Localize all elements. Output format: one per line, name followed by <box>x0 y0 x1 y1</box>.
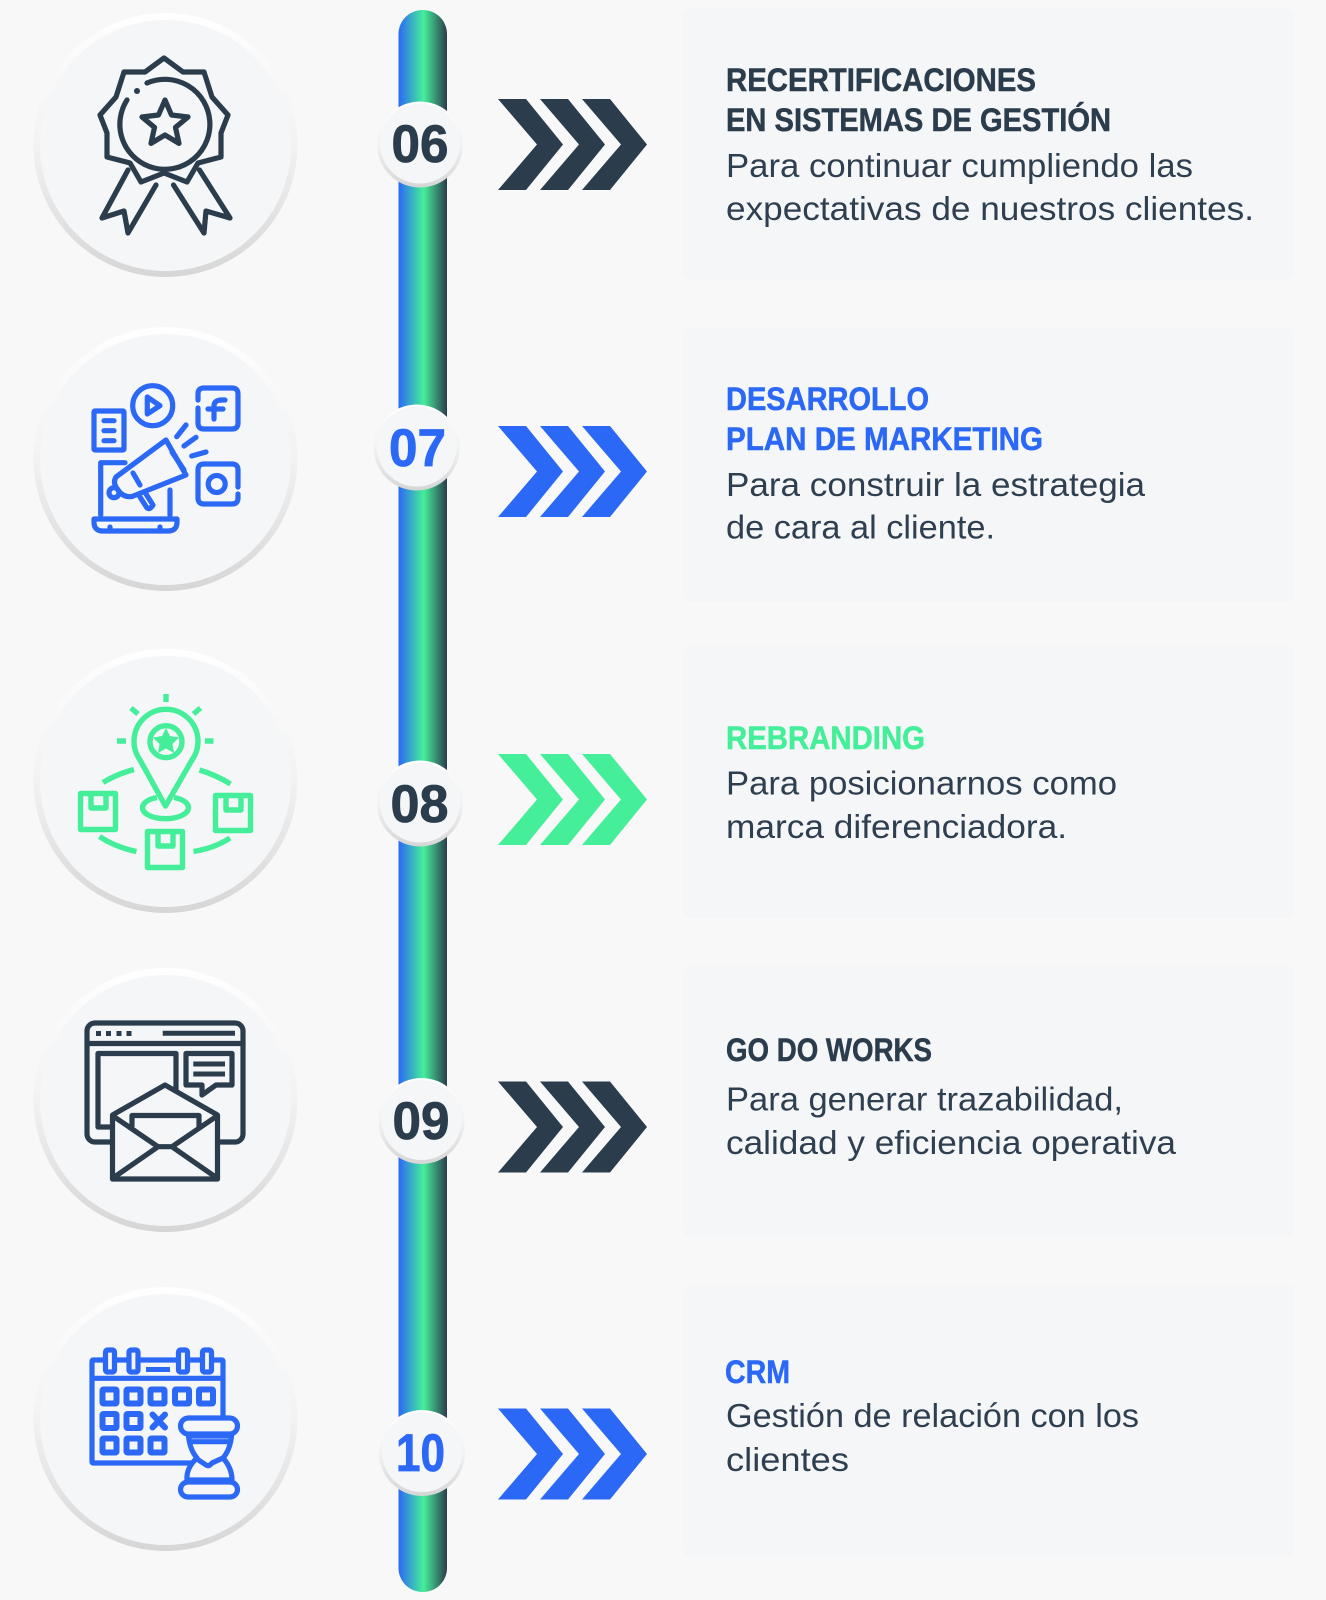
text: rebranding description: Para posicionarnos como <box>726 764 1117 802</box>
heading: recertificaciones: RECERTIFICACIONES <box>726 62 1036 98</box>
icon: calendar with hourglass <box>92 1350 238 1497</box>
heading: desarrollo plan de marketing: DESARROLLO <box>726 381 929 417</box>
heading: crm: CRM <box>725 1354 790 1390</box>
text: crm description: Gestión de relación con los <box>726 1397 1139 1434</box>
panel: crm <box>683 1284 1294 1557</box>
icon circle: calendar hourglass <box>34 1287 298 1551</box>
icon circle: web mail <box>34 968 298 1232</box>
panel: rebranding <box>683 645 1294 918</box>
number badge 06 <box>377 102 463 188</box>
panel: desarrollo plan de marketing <box>683 327 1294 602</box>
number badge 07: 07 <box>389 419 446 478</box>
arrow: chevrons 08 <box>498 754 647 845</box>
icon: location pin with boxes <box>80 694 250 868</box>
number badge 07 <box>374 404 460 490</box>
heading: go do works: GO DO WORKS <box>726 1032 932 1068</box>
text: marketing description: Para construir la estrategia <box>726 466 1146 503</box>
text: go do works description <box>726 1080 1177 1161</box>
icon: social marketing megaphone <box>94 386 238 531</box>
number badge 09 <box>378 1078 464 1164</box>
text: recertificaciones description: expectativas de nuestros clientes. <box>726 190 1254 227</box>
text: rebranding description <box>726 764 1117 845</box>
number badge 10 <box>379 1410 465 1496</box>
number badge 08: 08 <box>390 775 448 834</box>
text: rebranding description: marca diferenciadora. <box>726 808 1067 845</box>
icon: award ribbon <box>100 58 230 233</box>
text: crm description <box>726 1397 1139 1478</box>
text: marketing description <box>726 466 1146 546</box>
text: crm description: clientes <box>726 1441 849 1478</box>
heading: rebranding: REBRANDING <box>726 720 925 756</box>
number badge 09: 09 <box>392 1092 450 1151</box>
icon: browser window with envelope <box>87 1023 243 1179</box>
number badge 10: 10 <box>396 1424 445 1483</box>
text: marketing description: de cara al cliente. <box>726 508 995 546</box>
arrow: chevrons 07 <box>498 426 647 517</box>
number badge 06: 06 <box>392 115 448 174</box>
heading: desarrollo plan de marketing <box>726 381 1043 457</box>
icon circle: location branding <box>34 649 298 913</box>
text: recertificaciones description: Para continuar cumpliendo las <box>726 147 1193 184</box>
timeline bar <box>398 10 447 1592</box>
heading: recertificaciones: EN SISTEMAS DE GESTIÓN <box>726 102 1111 138</box>
arrow: chevrons 10 <box>498 1408 647 1500</box>
panel: recertificaciones <box>683 8 1294 279</box>
heading: desarrollo plan de marketing: PLAN DE MARKETING <box>726 421 1043 457</box>
arrow: chevrons 09 <box>498 1082 647 1172</box>
text: recertificaciones description <box>726 147 1254 227</box>
text: go do works description: Para generar trazabilidad, <box>726 1080 1123 1118</box>
heading: recertificaciones <box>726 62 1111 138</box>
icon circle: social marketing <box>34 327 298 591</box>
number badge 08 <box>377 760 463 846</box>
arrow: chevrons 06 <box>498 99 647 190</box>
icon circle: award ribbon <box>34 13 298 277</box>
panel: go do works <box>683 965 1294 1237</box>
text: go do works description: calidad y eficiencia operativa <box>726 1124 1177 1161</box>
